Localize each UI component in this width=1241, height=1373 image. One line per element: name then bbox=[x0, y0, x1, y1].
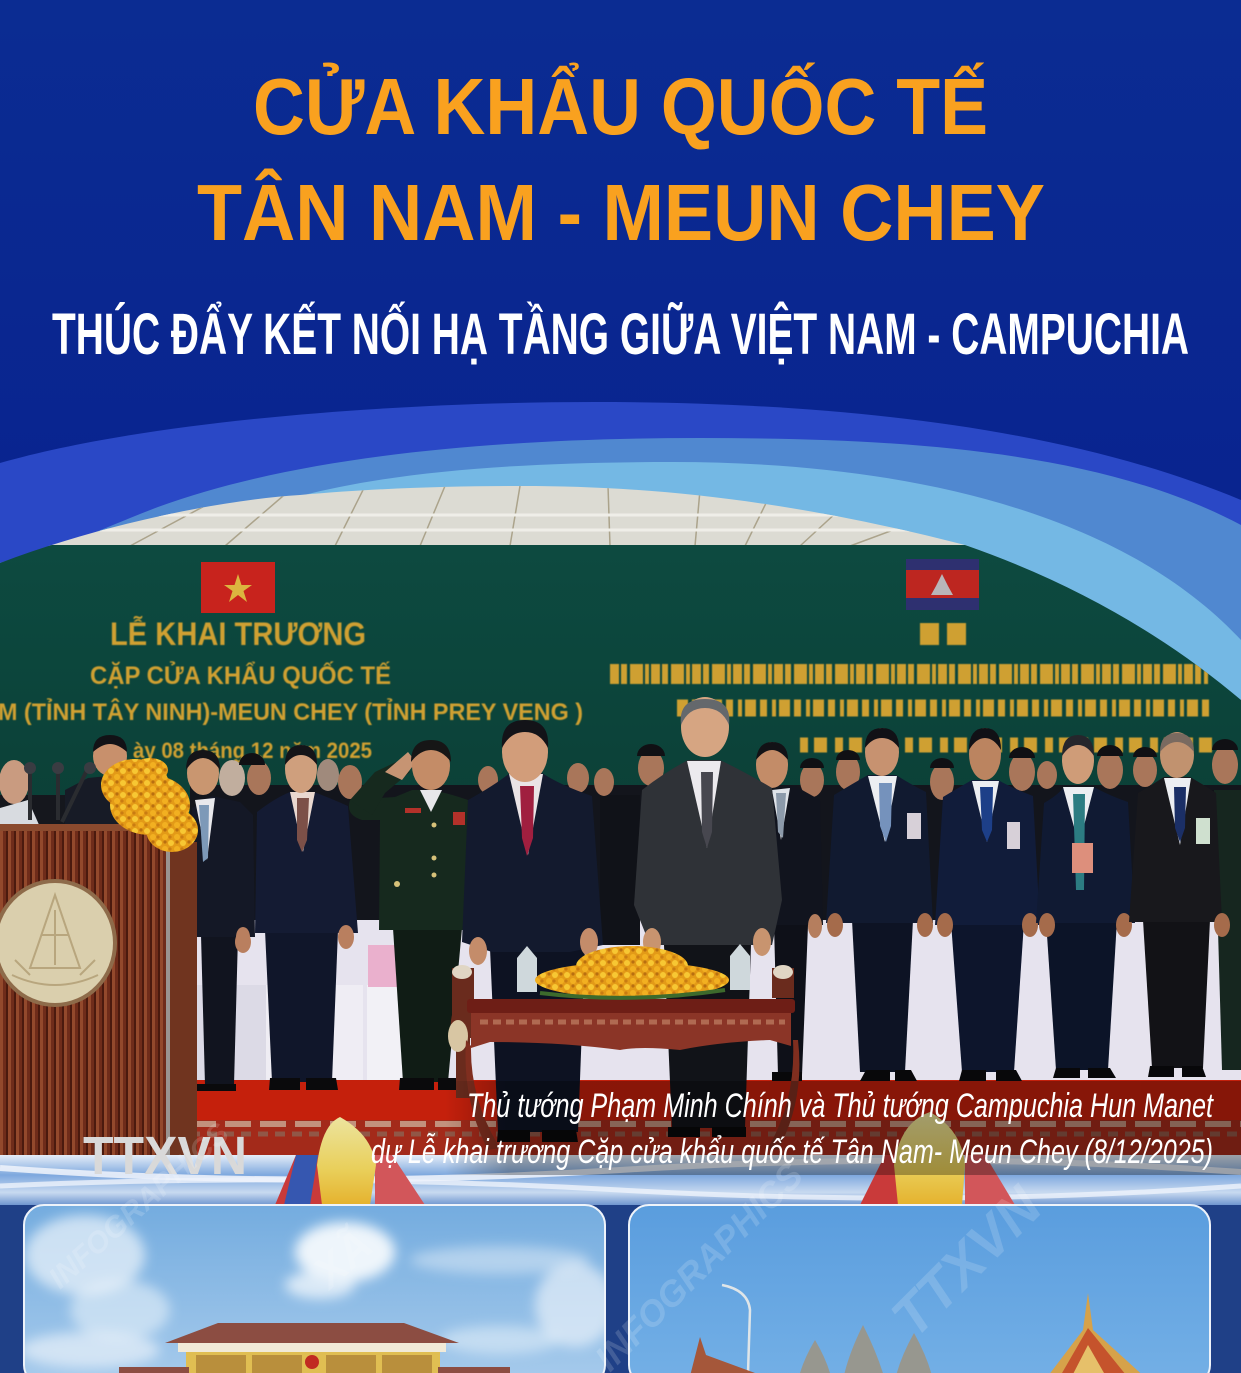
Vietnamese banner text: LỄ KHAI TRƯƠNG bbox=[110, 616, 366, 652]
photo card: Vietnam border gate bbox=[20, 1205, 615, 1373]
caption band bbox=[371, 1081, 1241, 1175]
delegate J bbox=[1129, 732, 1230, 1077]
red carpet bbox=[190, 1080, 1241, 1158]
water glasses bbox=[517, 946, 537, 992]
delegate F bbox=[756, 742, 823, 1081]
delegate B bbox=[236, 745, 358, 1090]
title: TÂN NAM - MEUN CHEY bbox=[197, 168, 1045, 257]
clouds bbox=[20, 1215, 615, 1368]
watermarks: INFOGRAPHICS bbox=[43, 1117, 236, 1295]
title: CỬA KHẨU QUỐC TẾ bbox=[253, 62, 988, 151]
temple towers bbox=[798, 1325, 933, 1373]
centre flowers bbox=[535, 965, 729, 996]
right gable bbox=[1050, 1293, 1140, 1373]
watermarks: TTXVN bbox=[879, 1173, 1054, 1348]
Vietnamese banner text: CẶP CỬA KHẨU QUỐC TẾ bbox=[90, 660, 391, 690]
watermarks bbox=[43, 1117, 1054, 1373]
speaker behind podium bbox=[0, 735, 127, 827]
ceiling bbox=[48, 486, 968, 546]
delegate G bbox=[826, 728, 933, 1081]
Vietnam flag bbox=[201, 562, 275, 613]
delegate C: military saluting bbox=[349, 740, 468, 1090]
Cambodia flag bbox=[906, 559, 979, 610]
TTXVN logo: TTXVN bbox=[83, 1126, 247, 1186]
left roof bbox=[689, 1337, 755, 1373]
drapery bbox=[0, 1112, 1241, 1205]
title bbox=[197, 62, 1045, 257]
podium flowers bbox=[101, 758, 198, 852]
street lamp bbox=[722, 1285, 750, 1373]
chair arms bbox=[451, 968, 474, 1098]
delegate D: PM Pham Minh Chinh bbox=[462, 720, 603, 1142]
building bbox=[119, 1323, 510, 1373]
main photo: opening ceremony bbox=[0, 480, 1241, 1205]
watermarks: XÃ bbox=[301, 1219, 382, 1299]
Khmer banner lettering texture bbox=[610, 634, 1215, 745]
podium bbox=[0, 824, 197, 1155]
crowd behind bbox=[190, 739, 1241, 945]
decorative waves bbox=[0, 402, 1241, 1373]
delegate A bbox=[186, 750, 255, 1091]
caption bbox=[371, 1087, 1214, 1171]
delegate: far right bbox=[1214, 790, 1241, 1070]
green backdrop bbox=[0, 545, 1241, 814]
delegate H bbox=[935, 728, 1040, 1081]
watermarks: INFOGRAPHICS bbox=[587, 1154, 811, 1373]
table with flowers bbox=[448, 944, 799, 1150]
delegate E: PM Hun Manet bbox=[634, 697, 782, 1137]
photo card: Cambodia border gate bbox=[629, 1205, 1210, 1373]
delegate I bbox=[1036, 735, 1135, 1078]
Vietnamese banner text: ày 08 tháng 12 năm 2025 bbox=[133, 738, 372, 763]
white chairs bbox=[197, 920, 1241, 1080]
Vietnamese banner text bbox=[0, 616, 583, 763]
Vietnamese banner text: M (TỈNH TÂY NINH)-MEUN CHEY (TỈNH PREY VENG ) bbox=[0, 697, 583, 726]
